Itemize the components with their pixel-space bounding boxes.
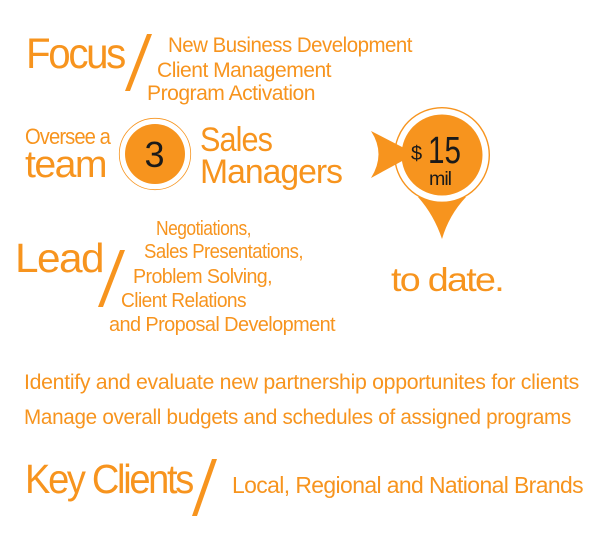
text block: responsibilities: Identify and evaluate new partnership opportunites for clients — [24, 371, 579, 394]
section: team — [25, 118, 342, 191]
icon: $15 mil pin — [371, 108, 489, 239]
text block: responsibilities: Manage overall budgets and schedules of assigned programs — [24, 406, 571, 429]
text block: focus items — [147, 34, 413, 105]
section: key clients — [25, 456, 583, 516]
ring — [395, 108, 489, 202]
text block: lead items — [109, 218, 336, 336]
disc — [402, 114, 482, 196]
text: brands: Local, Regional and National Brands — [232, 472, 583, 498]
heading: Key Clients: Key Clients — [25, 456, 194, 502]
slash: key clients — [192, 459, 217, 516]
text: mil: mil — [429, 169, 451, 190]
heading: Lead: Lead — [15, 235, 103, 281]
text: dollar sign: $ — [411, 143, 422, 165]
slash: lead — [98, 250, 125, 307]
badge: 3: 3 — [144, 134, 165, 175]
text block: lead items: Negotiations, — [156, 218, 251, 240]
badge: 3 — [119, 118, 191, 190]
section: focus — [26, 30, 413, 105]
section: lead — [15, 218, 336, 336]
text block: lead items: Client Relations — [121, 290, 247, 312]
text: Sales Managers: Managers — [200, 153, 342, 191]
heading: Focus: Focus — [26, 30, 125, 78]
arrow: left pointer — [371, 131, 404, 178]
text: Sales Managers — [200, 121, 342, 191]
arrow: bottom pointer — [418, 197, 466, 239]
text: Oversee a: Oversee a — [25, 124, 112, 149]
text block: lead items: Problem Solving, — [133, 266, 272, 288]
text block: focus items: New Business Development — [168, 34, 413, 57]
text block: focus items: Client Management — [157, 59, 332, 82]
text: 15: 15 — [428, 130, 461, 172]
text: to date: to date. — [391, 261, 503, 298]
slash: focus — [125, 34, 152, 91]
text: Sales Managers: Sales — [200, 121, 272, 159]
text: team: team — [25, 144, 106, 186]
text block: lead items: Sales Presentations, — [144, 241, 303, 263]
text block: focus items: Program Activation — [147, 82, 315, 105]
text block: lead items: and Proposal Development — [109, 314, 336, 336]
text block: responsibilities — [24, 371, 579, 429]
